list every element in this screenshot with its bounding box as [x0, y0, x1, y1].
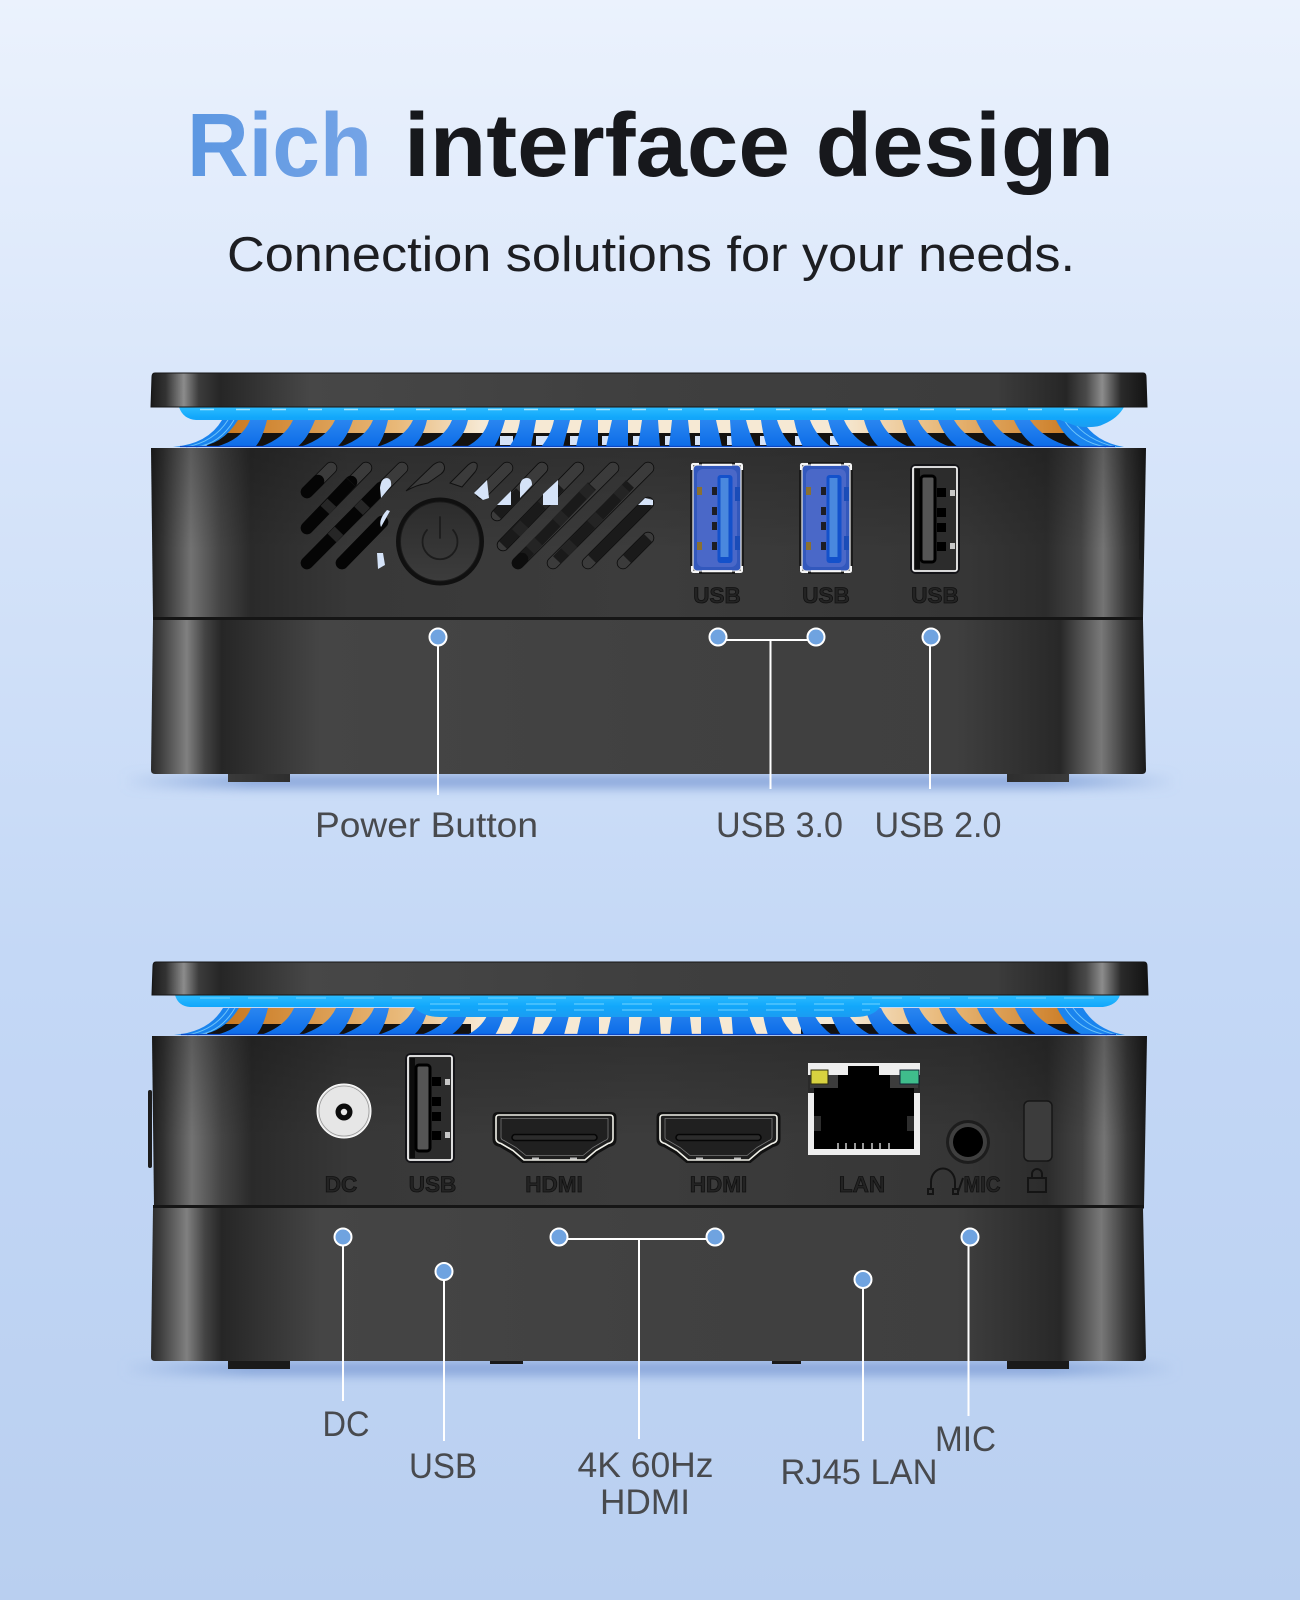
- callout: USB: [409, 1263, 477, 1486]
- title: Rich: [187, 96, 372, 196]
- embossed port labels: LAN: [839, 1172, 885, 1197]
- fin band: [173, 420, 1124, 447]
- ground shadow: [122, 1361, 1178, 1376]
- embossed port labels: USB: [911, 583, 959, 608]
- USB port: [405, 1053, 455, 1163]
- lower body: [151, 1208, 1146, 1361]
- DC jack: [317, 1084, 371, 1138]
- headphone icon with slash: [928, 1168, 963, 1194]
- callout: power button: [315, 628, 538, 845]
- HDMI port: [658, 1114, 779, 1162]
- embossed port labels: HDMI: [690, 1172, 747, 1197]
- upper body: [151, 448, 1146, 618]
- callout: 4K 60Hz HDMI: [550, 1228, 724, 1522]
- vent slots: [307, 468, 648, 563]
- upper body: [152, 1036, 1147, 1206]
- power button: [396, 498, 484, 586]
- USB 3.0 port: [690, 462, 744, 574]
- embossed port labels: DC: [325, 1172, 357, 1197]
- lock icon: [1028, 1169, 1046, 1192]
- fin band: [174, 1008, 1125, 1035]
- callout: MIC: MIC: [935, 1420, 996, 1459]
- USB 2.0 port: [910, 464, 960, 574]
- USB 3.0 port: [799, 462, 853, 574]
- embossed port labels: USB: [693, 583, 741, 608]
- top plate: [151, 373, 1147, 407]
- ground shadow: [122, 774, 1178, 789]
- light shards through vents: [377, 478, 653, 569]
- seam: [153, 1205, 1144, 1208]
- title: interface design: [404, 96, 1114, 196]
- embossed port labels: [325, 1172, 1000, 1197]
- blue glow bar: [179, 407, 1124, 427]
- embossed port labels: USB: [409, 1172, 456, 1197]
- callout: USB: USB: [409, 1447, 477, 1486]
- security lock slot: [1024, 1101, 1052, 1161]
- callout: MIC: [935, 1228, 996, 1459]
- leaf-shaped vent outlines: [406, 462, 477, 491]
- rubber feet and tabs: [228, 1360, 1069, 1369]
- side bump: [148, 1090, 152, 1168]
- callout: USB 3.0: USB 3.0: [716, 806, 843, 845]
- callout: RJ45 LAN: [780, 1271, 938, 1492]
- blue glow bar with central bulge: [175, 995, 1120, 1017]
- embossed port labels: MIC: [964, 1172, 1000, 1197]
- callout: power button: Power Button: [315, 806, 538, 845]
- top plate: [152, 962, 1148, 995]
- callout: USB 2.0: USB 2.0: [874, 806, 1002, 845]
- subtitle: Connection solutions for your needs.: [227, 228, 1075, 282]
- rubber feet: [228, 773, 1069, 782]
- device: front view: [122, 373, 1178, 789]
- callout: DC: [322, 1228, 370, 1444]
- lower body: [151, 620, 1146, 774]
- callout: RJ45 LAN: RJ45 LAN: [780, 1453, 938, 1492]
- side button shadow: [1139, 500, 1143, 560]
- embossed port labels: [693, 583, 959, 608]
- callout: USB 2.0: [874, 628, 1002, 845]
- callout: 4K 60Hz HDMI: 4K 60Hz: [578, 1446, 714, 1485]
- callout: 4K 60Hz HDMI: HDMI: [600, 1483, 690, 1522]
- audio jack: [946, 1120, 990, 1164]
- embossed port labels: HDMI: [525, 1172, 583, 1197]
- callout: USB 3.0: [710, 628, 843, 845]
- device: rear view: [122, 962, 1178, 1376]
- LAN port: [808, 1063, 920, 1155]
- HDMI port: [494, 1114, 615, 1162]
- seam: [153, 617, 1143, 620]
- embossed port labels: USB: [802, 583, 850, 608]
- callout: DC: DC: [322, 1405, 370, 1444]
